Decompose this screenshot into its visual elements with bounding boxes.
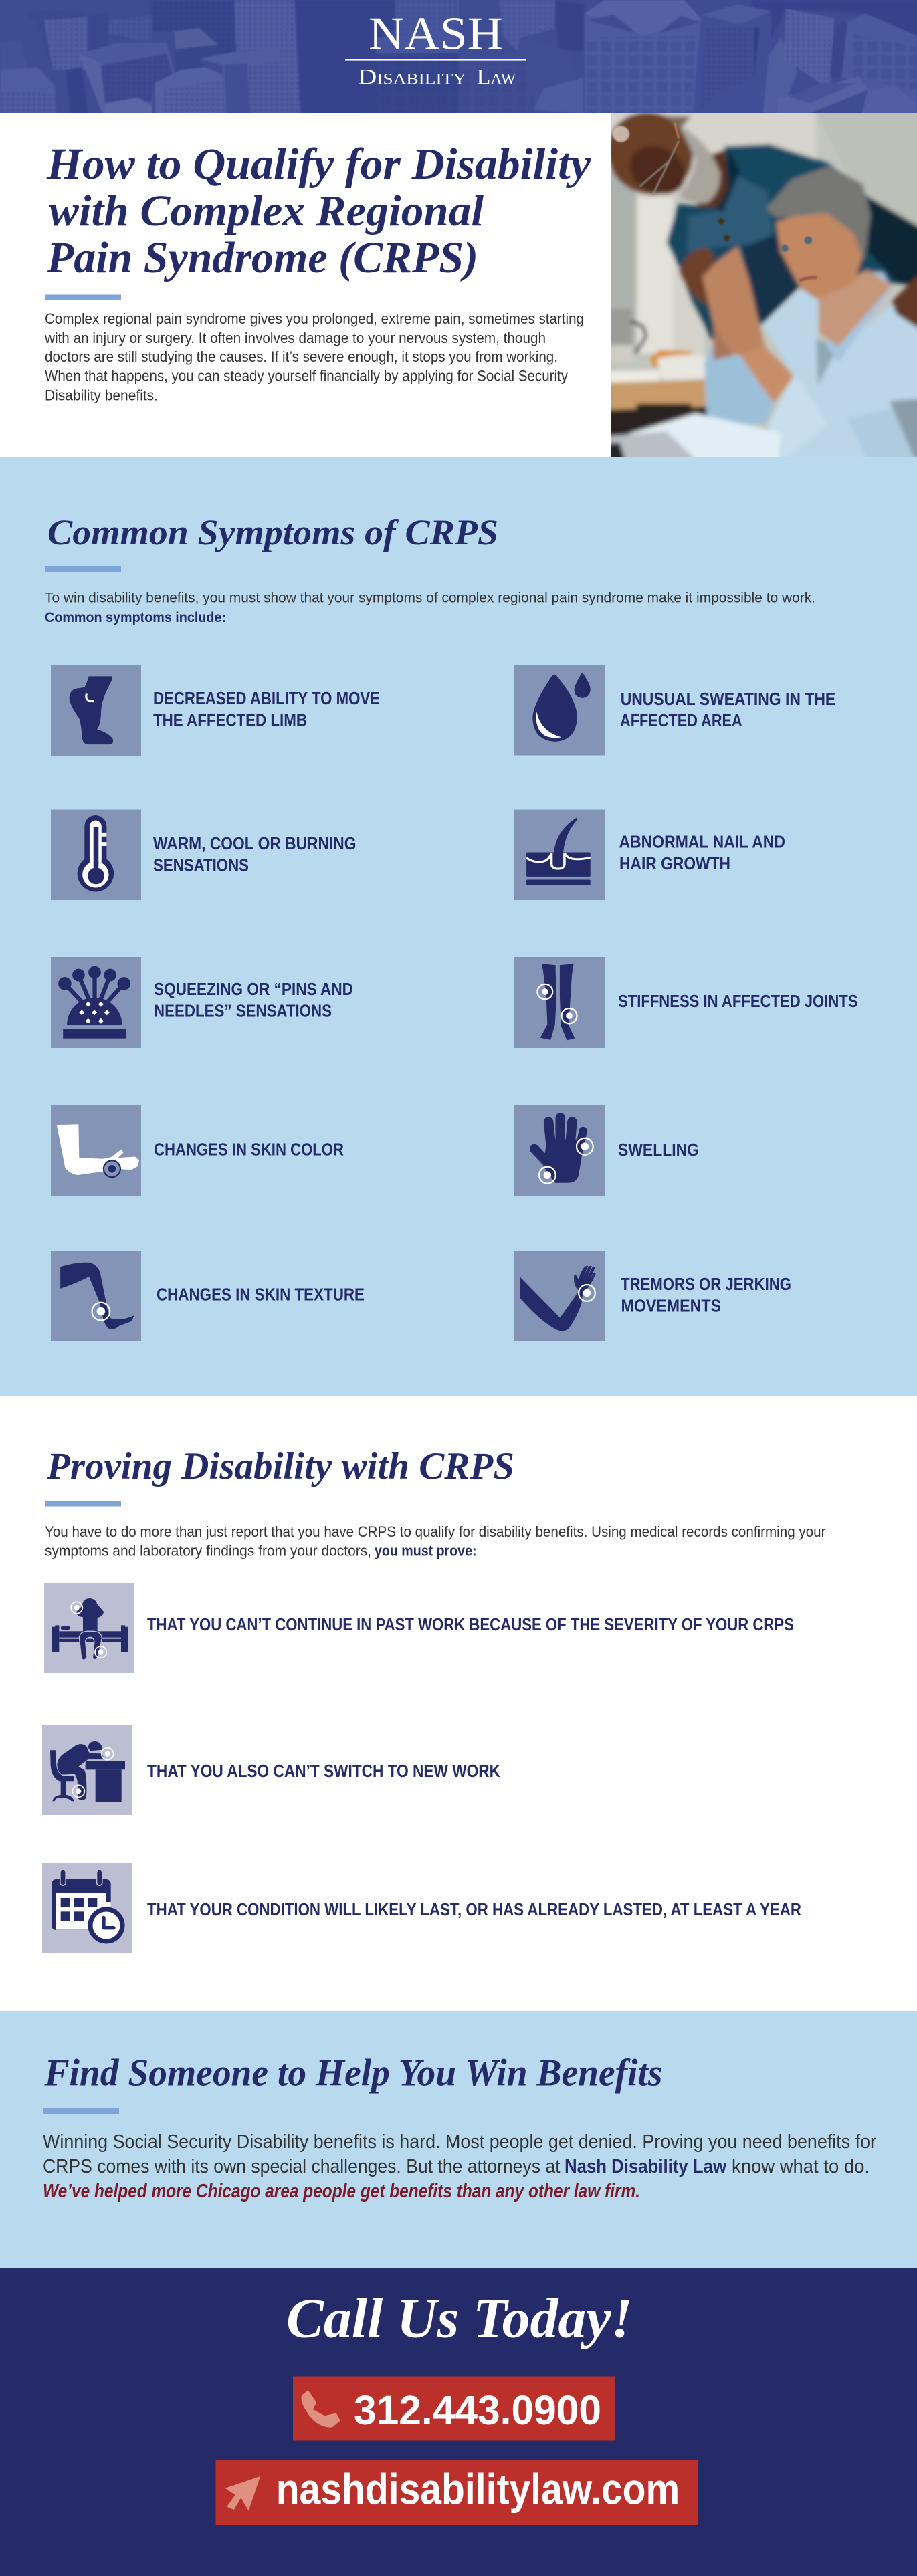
find help text [43,2131,876,2202]
intro text [44,310,584,404]
symptom: warm cool or burning [51,809,356,900]
panel: call to action [0,2268,917,2576]
symptom: abnormal nail and hair growth [514,809,785,900]
find help text: Nash Disability Law [565,2156,726,2177]
proof item: new work [42,1725,501,1815]
proving intro text: You have to do more than just report that you have CRPS to qualify for disability benefits. Using medical records confirming your [45,1523,825,1540]
find help text: Winning Social Security Disability benefits is hard. Most people get denied. Proving you need benefits for [43,2131,876,2153]
logo subtitle Disability Law: Law [477,65,516,89]
intro text: Disability benefits. [45,387,158,404]
icon: legs [537,964,577,1040]
find help text: CRPS comes with its own special challenges. But the attorneys at [43,2156,561,2177]
symptom: changes in skin texture [51,1251,365,1341]
icon: foot [70,676,113,744]
symptom: unusual sweating: AFFECTED AREA [620,712,742,730]
symptom: abnormal nail and hair growth: HAIR GROWTH [619,855,730,873]
proof item: lasting a year [42,1863,801,1953]
symptom: warm cool or burning: SENSATIONS [153,856,249,875]
header banner [0,0,917,114]
symptom: unusual sweating [514,665,835,756]
icon: bent leg [60,1263,134,1329]
symptom: changes in skin color: CHANGES IN SKIN COLOR [154,1141,344,1160]
symptom: decreased ability to move: DECREASED ABILITY TO MOVE [153,689,380,708]
symptom: changes in skin color [51,1105,344,1196]
icon: cursor arrow [225,2476,260,2511]
symptom: pins and needles [51,957,353,1048]
panel: common symptoms [0,457,917,1396]
intro panel [44,140,591,404]
man head [698,150,728,207]
symptom: tremors: TREMORS OR JERKING [621,1275,791,1294]
proving intro text: symptoms and laboratory findings from your doctors, [45,1542,371,1560]
logo subtitle Disability Law [359,70,516,84]
symptom: tremors: MOVEMENTS [621,1297,721,1316]
symptom: swelling: SWELLING [618,1141,699,1160]
icon: phone [301,2390,340,2428]
icon: shaking arm [520,1266,596,1331]
symptoms intro text [45,590,815,625]
intro text: Complex regional pain syndrome gives you prolonged, extreme pain, sometimes starting [45,310,584,327]
heading: call us today: Call Us Today! [286,2287,633,2350]
proving intro text [45,1523,825,1560]
proving intro text: you must prove: [375,1542,476,1560]
symptom: tremors [514,1251,791,1341]
main title: How to Qualify for Disability [46,140,591,189]
woman neck and face [818,270,892,346]
symptoms intro text: To win disability benefits, you must show that your symptoms of complex regional pain syndrome make it impossible to work. [45,590,815,606]
symptom: pins and needles: SQUEEZING OR “PINS AND [154,980,353,999]
icon: pin cushion [58,966,130,1039]
intro text: When that happens, you can steady yourself financially by applying for Social Security [45,368,568,384]
proof item: past work [44,1583,794,1673]
symptom: pins and needles: NEEDLES” SENSATIONS [154,1002,332,1021]
logo [345,18,526,84]
icon: water drops [532,672,591,742]
main title: Pain Syndrome (CRPS) [46,233,478,282]
logo wordmark NASH: NASH [369,8,503,60]
panel: find help [0,2011,917,2268]
woman robe [762,288,917,464]
icon: person sitting on bed [52,1598,128,1660]
main title [46,140,591,282]
symptom: swelling [514,1105,699,1196]
icon: hand [534,1117,593,1184]
button: phone [293,2377,615,2441]
symptom: warm cool or burning: WARM, COOL OR BURNING [153,835,356,853]
symptom: changes in skin texture: CHANGES IN SKIN TEXTURE [157,1286,365,1305]
button: website [215,2460,698,2525]
symptom: stiffness in joints: STIFFNESS IN AFFECTED JOINTS [618,992,857,1011]
icon: white arm [57,1124,139,1177]
intro text: doctors are still studying the causes. If it’s severe enough, it stops you from working. [45,348,558,365]
heading: proving disability: Proving Disability with CRPS [46,1445,514,1487]
photo: man comforting woman in pain [611,113,917,457]
panel: proving disability [0,1396,917,2011]
icon: person slumped at desk [50,1741,125,1802]
symptom: decreased ability to move: THE AFFECTED LIMB [153,712,307,730]
intro text: with an injury or surgery. It often involves damage to your nervous system, though [44,330,546,346]
symptom: abnormal nail and hair growth: ABNORMAL NAIL AND [619,833,785,852]
main title: with Complex Regional [49,187,484,235]
icon: thermometer [78,815,114,891]
proof item: new work: THAT YOU ALSO CAN’T SWITCH TO NEW WORK [147,1762,501,1781]
symptoms intro text: Common symptoms include: [45,610,226,625]
symptoms accent bar [45,566,121,572]
man hand [679,247,714,306]
symptom: decreased ability to move [51,665,380,756]
proof item: past work: THAT YOU CAN’T CONTINUE IN PAST WORK BECAUSE OF THE SEVERITY OF YOUR CRPS [147,1616,794,1634]
proof item: lasting a year: THAT YOUR CONDITION WILL LIKELY LAST, OR HAS ALREADY LASTED, AT LEAST A YEAR [147,1901,801,1919]
paper and laptop [629,413,781,464]
button: website: nashdisabilitylaw.com [276,2465,680,2514]
heading: common symptoms: Common Symptoms of CRPS [47,512,498,552]
heading: find someone: Find Someone to Help You Win Benefits [44,2052,662,2095]
find help accent bar [43,2108,119,2114]
man hand on shoulder [892,277,917,331]
title accent bar [45,294,121,300]
symptom: unusual sweating: UNUSUAL SWEATING IN THE [621,690,835,709]
logo subtitle Disability Law: Disability [358,65,466,89]
symptom: stiffness in joints [514,957,857,1048]
find help text: know what to do. [732,2156,870,2177]
woman sleeve, forearm, hands [702,345,775,427]
button: phone: 312.443.0900 [354,2387,601,2433]
proving accent bar [45,1501,121,1506]
man sweater [667,144,917,340]
icon: calendar and clock [52,1872,122,1941]
icon: hair follicle [526,818,591,885]
find help text: We’ve helped more Chicago area people get benefits than any other law firm. [43,2181,640,2202]
